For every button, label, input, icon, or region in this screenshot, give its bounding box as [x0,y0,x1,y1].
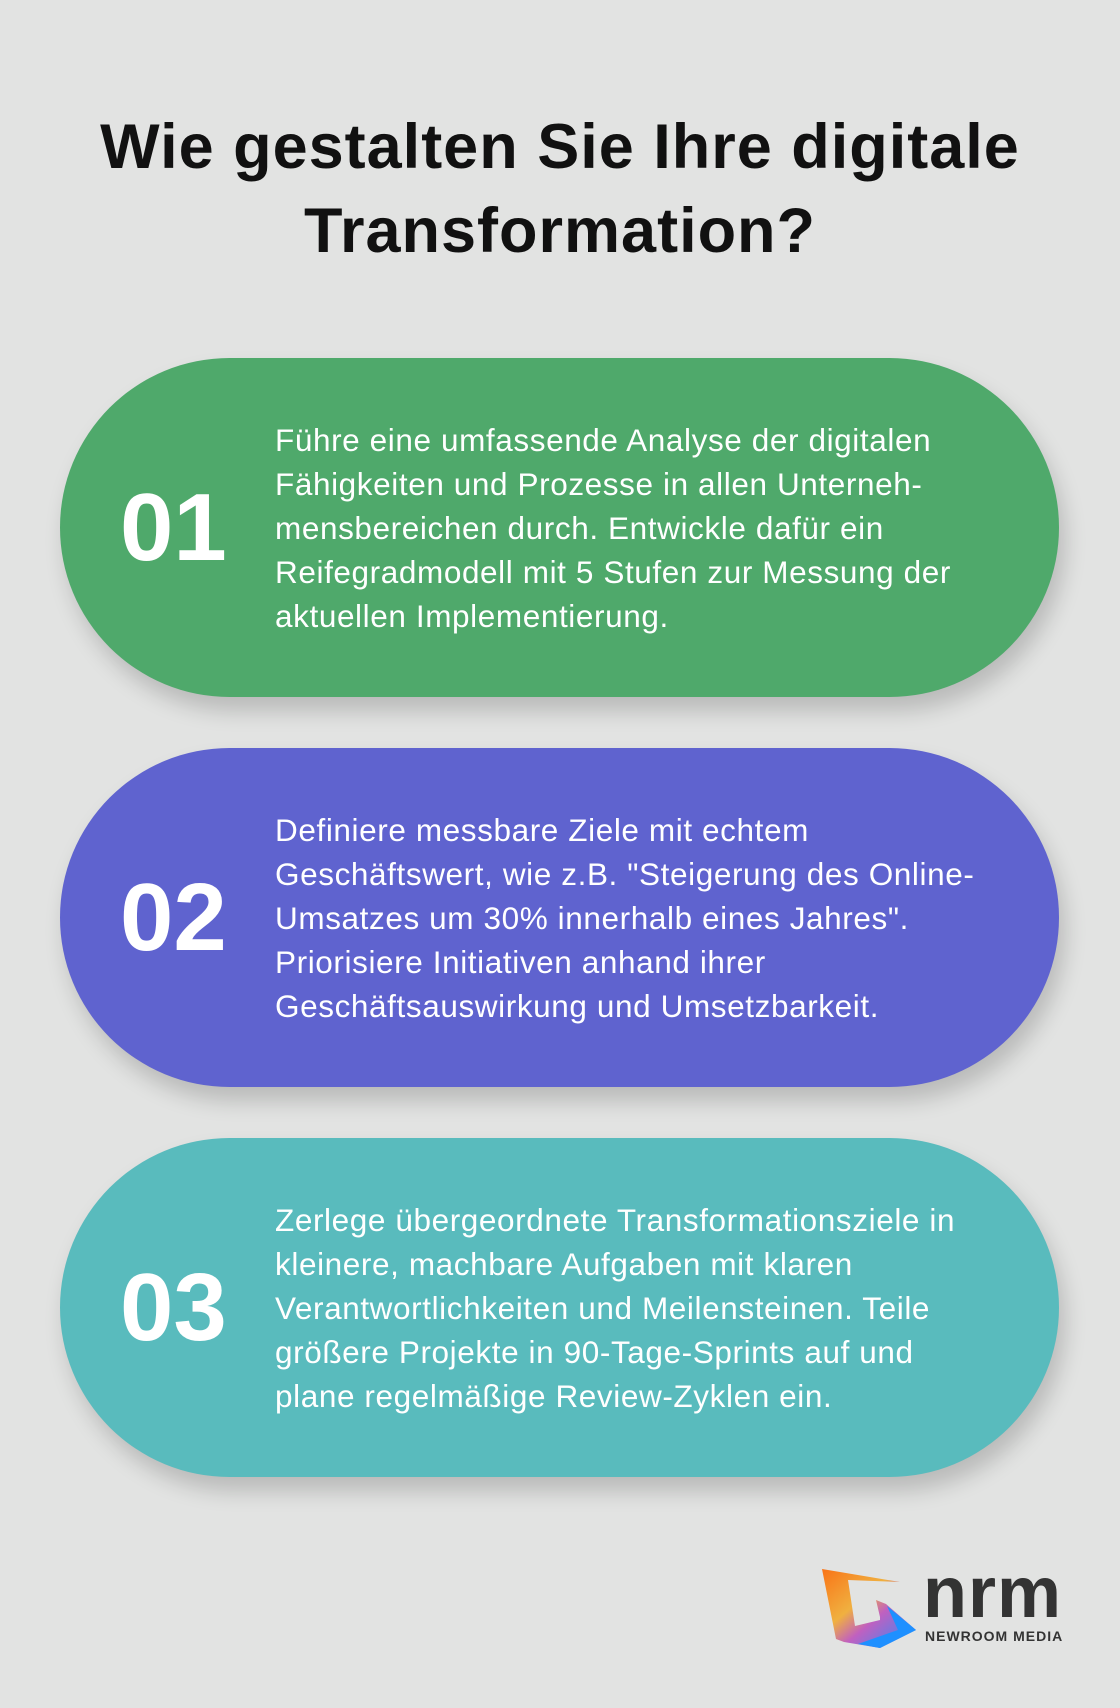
text step 02 [275,812,974,1024]
number 01: 01 [120,474,227,580]
text step 01: Führe eine umfassende Analyse der digitalen [275,422,931,458]
title: Transformation? [304,196,816,266]
logo text: nrm [923,1553,1062,1633]
text step 03 [275,1202,955,1414]
text step 02: Umsatzes um 30% innerhalb eines Jahres". [275,900,909,936]
logo subtext: NEWROOM MEDIA [925,1628,1063,1644]
panel: step 01 [60,358,1059,697]
number 03: 03 [120,1254,227,1360]
panel: step 03 [60,1138,1059,1477]
text step 03: Verantwortlichkeiten und Meilensteinen. Teile [275,1290,930,1326]
icon: logo mark [822,1569,916,1648]
text step 02: Geschäftsauswirkung und Umsetzbarkeit. [275,988,879,1024]
text step 01: mensbereichen durch. Entwickle dafür ein [275,510,884,546]
text step 02: Definiere messbare Ziele mit echtem [275,812,809,848]
text step 01: Reifegradmodell mit 5 Stufen zur Messung der [275,554,951,590]
logo [822,1553,1063,1648]
text step 02: Priorisiere Initiativen anhand ihrer [275,944,766,980]
text step 03: Zerlege übergeordnete Transformationsziele in [275,1202,955,1238]
text step 03: kleinere, machbare Aufgaben mit klaren [275,1246,853,1282]
title [100,112,1020,266]
text step 02: Geschäftswert, wie z.B. "Steigerung des Online- [275,856,974,892]
text step 03: plane regelmäßige Review-Zyklen ein. [275,1378,832,1414]
panel: step 02 [60,748,1059,1087]
text step 01: Fähigkeiten und Prozesse in allen Unterneh- [275,466,922,502]
text step 01 [275,422,951,634]
number 02: 02 [120,864,227,970]
text step 03: größere Projekte in 90-Tage-Sprints auf und [275,1334,914,1370]
text step 01: aktuellen Implementierung. [275,598,669,634]
title: Wie gestalten Sie Ihre digitale [100,112,1020,182]
